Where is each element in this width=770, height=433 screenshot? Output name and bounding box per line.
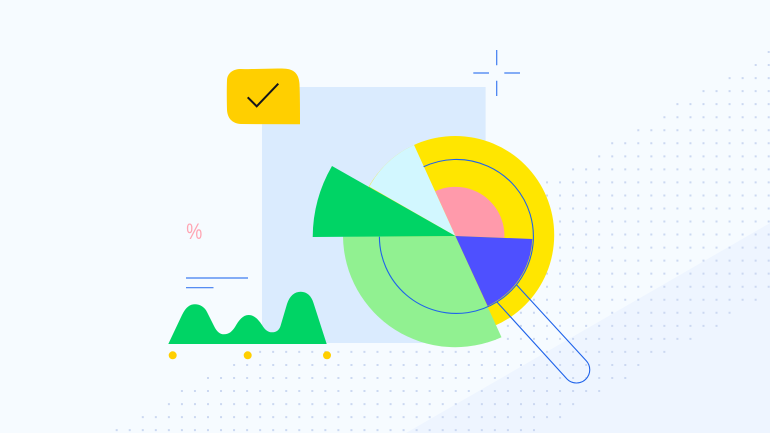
pie segment: pale cyan [369, 145, 455, 236]
pie segment: pink [435, 187, 504, 238]
chart axis dots [169, 351, 331, 359]
magnifier lens ring [379, 159, 533, 313]
pie segment: indigo [455, 236, 532, 306]
text placeholder lines [186, 278, 248, 288]
background dot grid [116, 52, 770, 430]
badge background [227, 69, 300, 124]
check icon [248, 84, 278, 106]
background light diagonal panel [406, 223, 770, 433]
percent symbol: % [186, 219, 202, 244]
yellow outer disc [356, 136, 554, 334]
pie segment: light green [343, 236, 502, 347]
magnifier handle [497, 285, 590, 383]
checkmark badge [227, 69, 300, 124]
document panel [262, 87, 486, 343]
sparkle cross icon [473, 50, 520, 96]
area chart [168, 292, 327, 344]
pie segment: dark green [313, 166, 455, 237]
